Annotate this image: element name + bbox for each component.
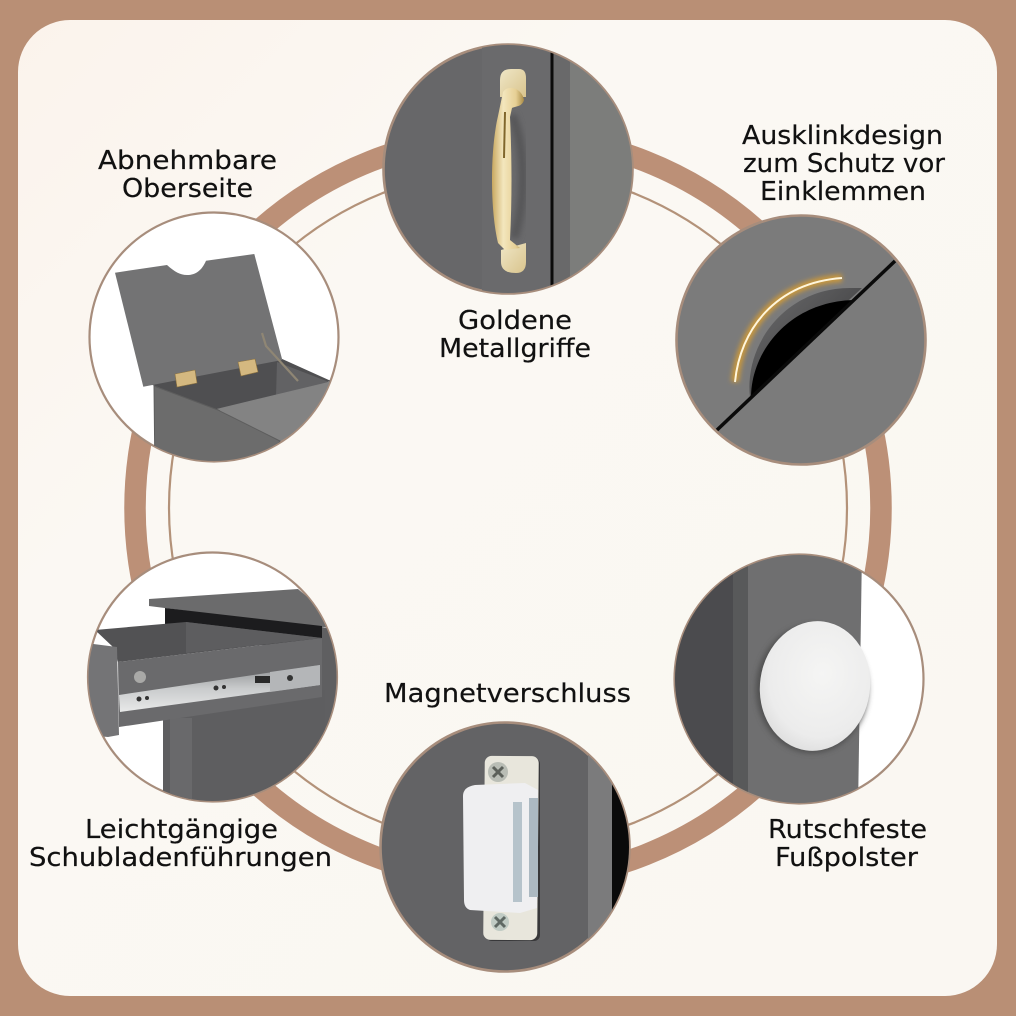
recess opening xyxy=(751,300,853,396)
heading: Ausklinkdesign: Einklemmen xyxy=(760,177,926,207)
heading: Leichtgängige Schubladenführungen xyxy=(29,815,332,873)
heading: Leichtgängige Schubladenführungen: Schubladenführungen xyxy=(29,843,332,873)
handle xyxy=(492,69,526,273)
dark side xyxy=(675,574,733,784)
heading: Goldene Metallgriffe xyxy=(439,306,591,364)
heading: Rutschfeste Fußpolster: Rutschfeste xyxy=(768,815,927,845)
cabinet right face xyxy=(218,382,330,441)
recess xyxy=(749,288,862,397)
heading: Rutschfeste Fußpolster: Fußpolster xyxy=(775,843,919,873)
panel: non-slip foot pad xyxy=(670,550,924,810)
decorative ring: thick outer xyxy=(135,135,881,881)
hinges xyxy=(175,359,258,387)
heading: Ausklinkdesign: zum Schutz vor xyxy=(743,149,946,179)
metal strips xyxy=(513,802,522,902)
screws xyxy=(488,762,508,782)
gold highlight arc xyxy=(735,278,842,382)
heading: Leichtgängige Schubladenführungen: Leichtgängige xyxy=(85,815,278,845)
cabinet shadow xyxy=(165,608,322,645)
heading: Abnehmbare Oberseite: Abnehmbare xyxy=(98,146,277,176)
lid xyxy=(115,254,282,387)
cabinet side xyxy=(322,628,336,735)
drawer interior xyxy=(95,622,322,662)
heading: Goldene Metallgriffe: Goldene xyxy=(458,306,572,336)
panel: removable top xyxy=(90,212,338,480)
metal slide xyxy=(119,665,320,712)
door slit xyxy=(717,261,895,430)
panel: golden handle xyxy=(384,40,640,300)
drawer side xyxy=(118,638,322,727)
decorative ring: thin inner xyxy=(169,169,847,847)
cabinet top xyxy=(149,589,340,628)
door gap xyxy=(550,52,554,286)
gold glow xyxy=(735,278,842,382)
slide holes xyxy=(136,675,293,702)
heading: Abnehmbare Oberseite xyxy=(98,146,277,204)
cabinet lower door xyxy=(163,697,325,801)
plate shadow xyxy=(486,758,540,941)
cabinet left face xyxy=(154,386,280,461)
heading: Ausklinkdesign xyxy=(742,121,946,207)
heading: Goldene Metallgriffe: Metallgriffe xyxy=(439,334,591,364)
panel: drawer slides xyxy=(86,552,342,810)
cabinet interior xyxy=(150,358,331,411)
mounting plate xyxy=(483,756,539,940)
panel: pinch protection cut-out xyxy=(676,216,926,464)
cabinet leg xyxy=(748,550,862,810)
heading: Rutschfeste Fußpolster xyxy=(768,815,927,873)
handle shadow xyxy=(512,115,523,238)
heading: Abnehmbare Oberseite: Oberseite xyxy=(122,174,253,204)
heading: Magnetverschluss: Magnetverschluss xyxy=(384,679,631,709)
pad shadow xyxy=(756,625,868,753)
drawer front xyxy=(86,643,119,737)
slide bracket xyxy=(270,665,320,692)
lid strut xyxy=(262,333,298,381)
catch body xyxy=(463,783,538,913)
white pad xyxy=(751,614,879,758)
screw xyxy=(134,671,146,683)
door panels xyxy=(482,40,552,300)
panel: magnetic catch xyxy=(380,720,632,980)
door edge strip xyxy=(588,755,612,939)
heading: Ausklinkdesign: Ausklinkdesign xyxy=(742,121,943,151)
